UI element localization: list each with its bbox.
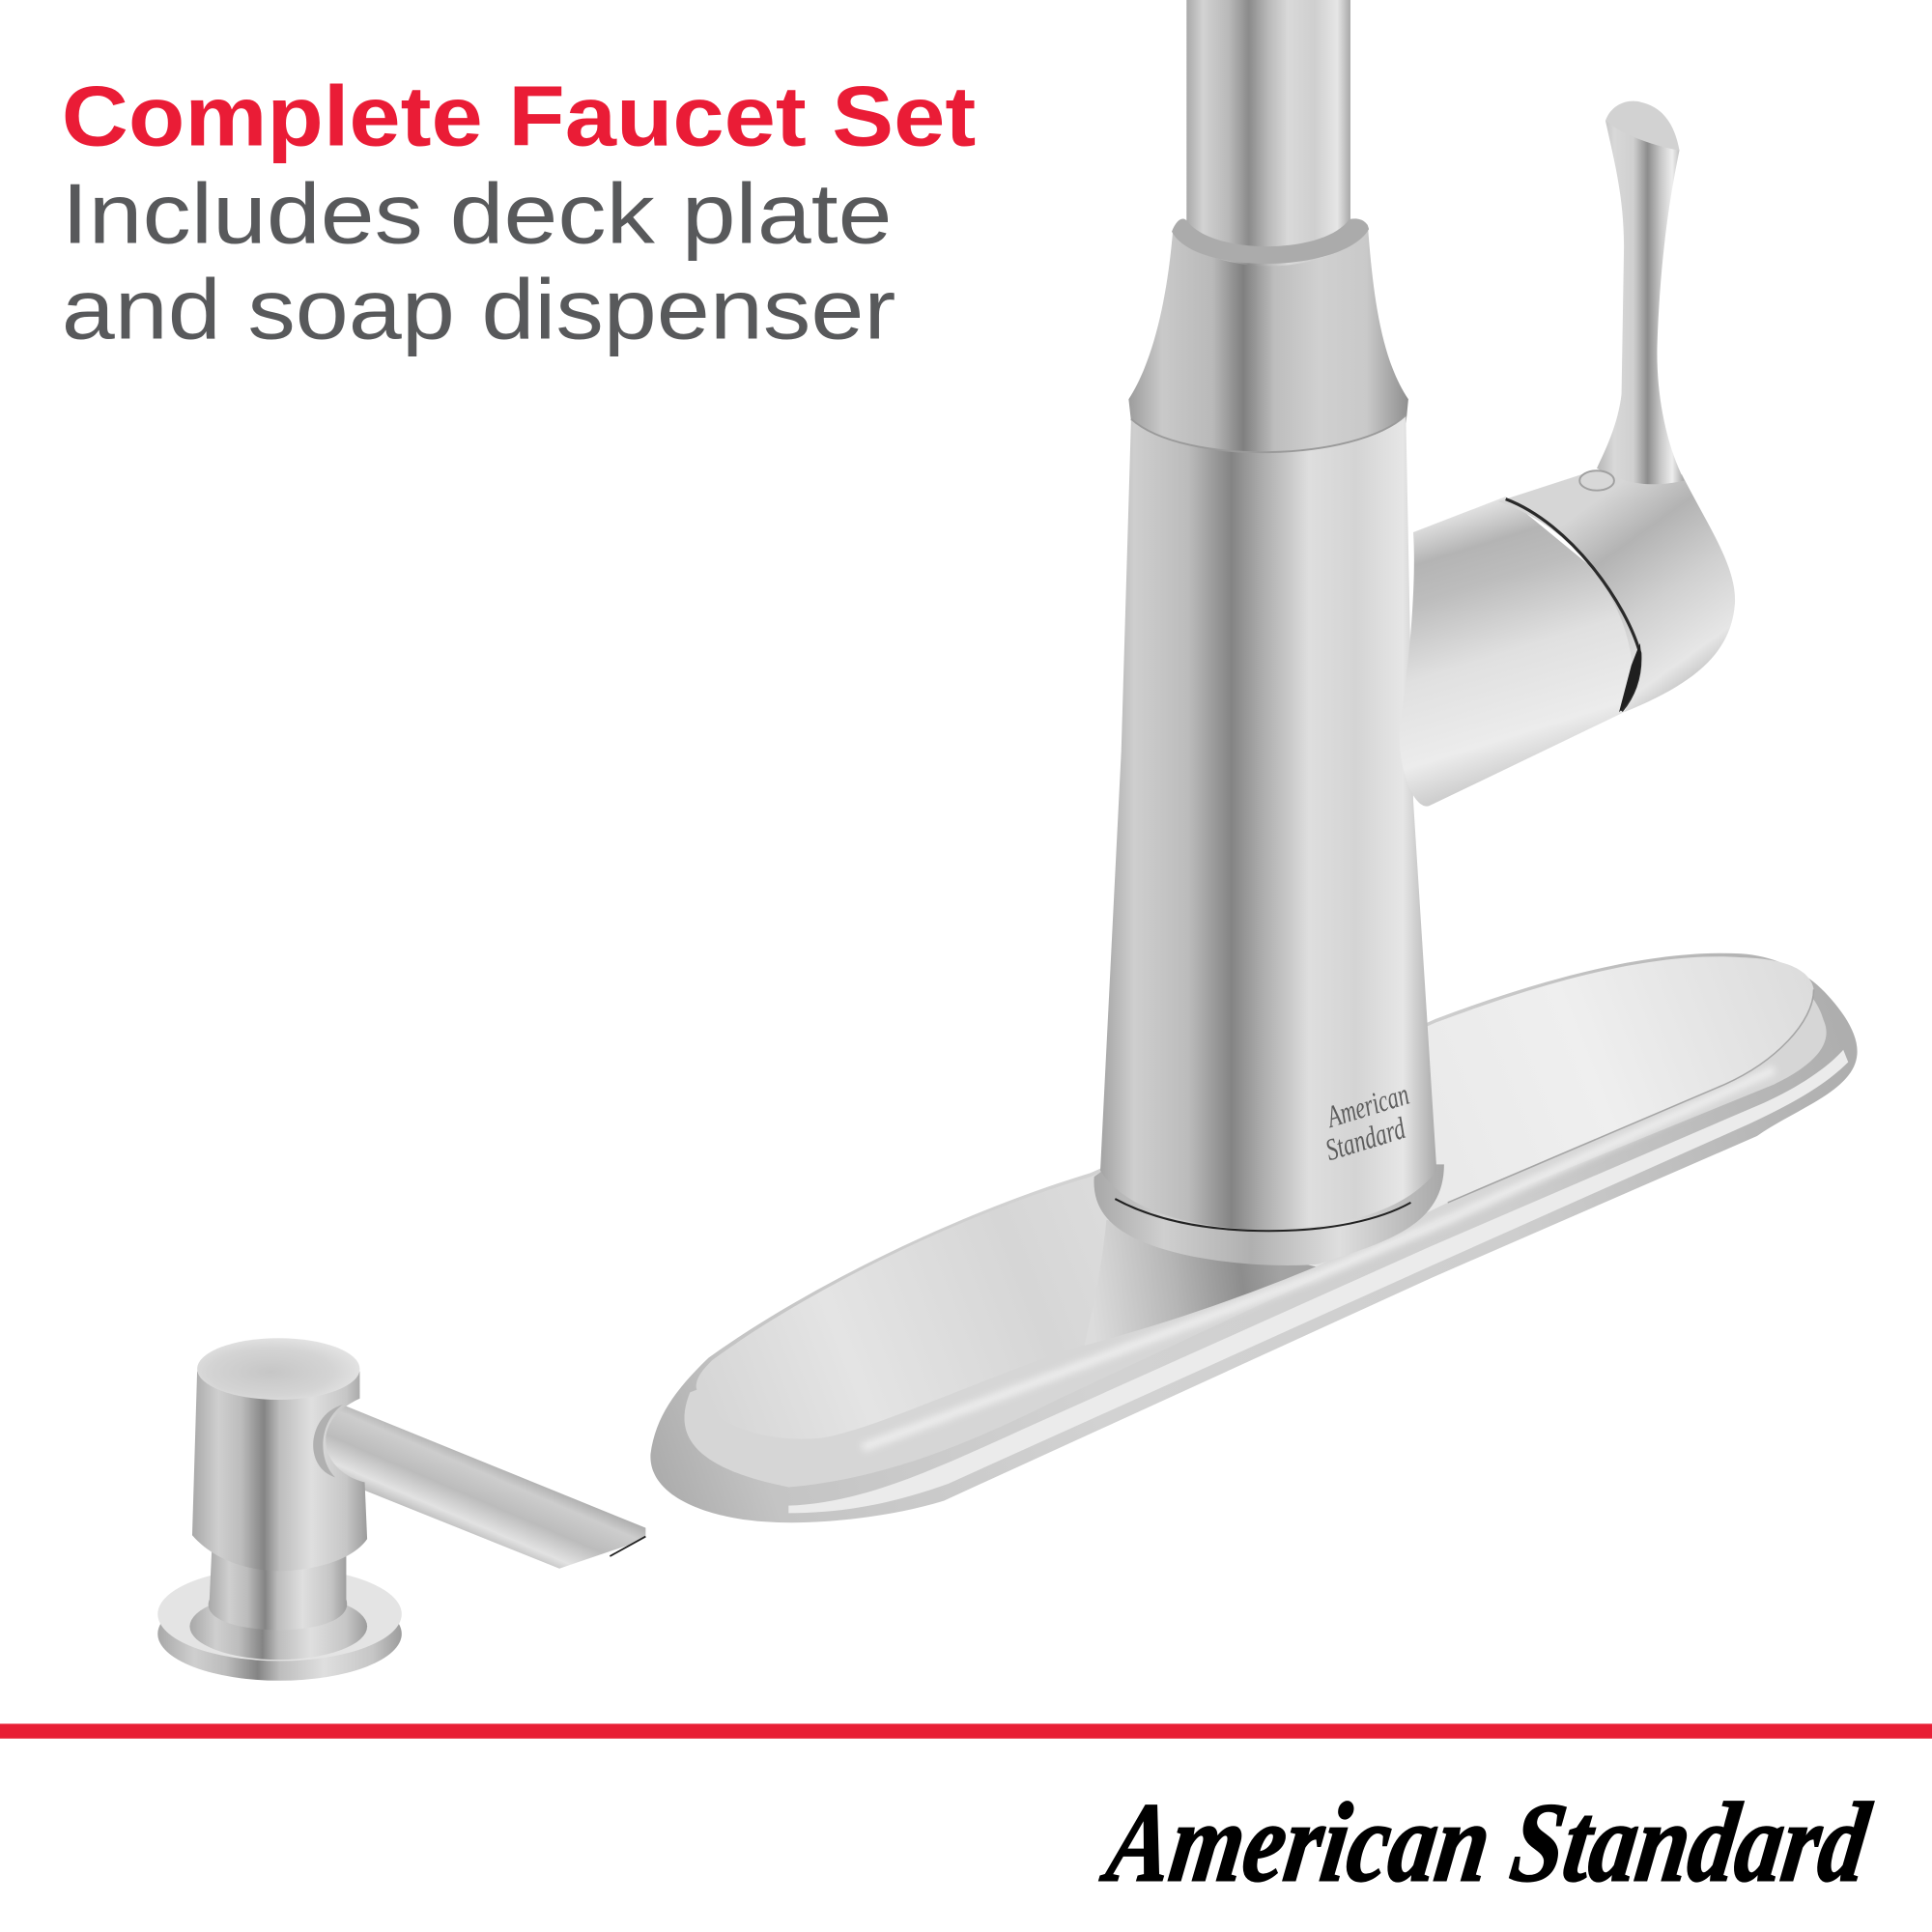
left end shading (784, 1441, 793, 1518)
deck plate (650, 953, 1858, 1522)
upper spout tube (1186, 0, 1350, 278)
dispenser flange (157, 1587, 402, 1681)
heading block (62, 69, 976, 357)
faucet body (1100, 218, 1436, 1231)
handle button (1579, 470, 1614, 491)
handle seam (1506, 499, 1640, 711)
spout socket (313, 1405, 343, 1477)
shadow under faucet base (1084, 1220, 1316, 1346)
plate inner bright streak (863, 1069, 1775, 1448)
red divider (0, 1723, 1932, 1739)
base ring line (1115, 1199, 1410, 1231)
dispenser base step (189, 1593, 367, 1660)
handle stub (1400, 497, 1651, 807)
dispenser body (192, 1372, 367, 1571)
soap dispenser (157, 1338, 645, 1681)
collar and shoulder (1128, 224, 1408, 454)
plate top surface (696, 956, 1814, 1439)
collar opening (1172, 218, 1369, 264)
faucet base collar (1094, 1164, 1444, 1265)
lever handle (1400, 101, 1735, 807)
lever blade (1597, 113, 1685, 484)
shoulder ledge (1131, 415, 1406, 452)
lever tip (1605, 101, 1680, 151)
subheading line 2: and soap dispenser (62, 262, 895, 357)
dispenser spout (313, 1405, 645, 1569)
engraved brand mark: American (1321, 1077, 1413, 1134)
handle cap (1498, 472, 1735, 712)
plate bright lower band (788, 1050, 1848, 1513)
engraved brand mark: Standard (1321, 1111, 1410, 1167)
dispenser neck (209, 1547, 347, 1631)
subheading line 1: Includes deck plate (62, 165, 892, 261)
engraved brand mark (1321, 1077, 1413, 1167)
dark inner step line (1448, 989, 1814, 1203)
dispenser cap (197, 1338, 359, 1400)
heading: Complete Faucet Set: Complete Faucet Set (62, 69, 976, 164)
plate mid ledge (684, 967, 1827, 1488)
main body (1100, 415, 1436, 1230)
